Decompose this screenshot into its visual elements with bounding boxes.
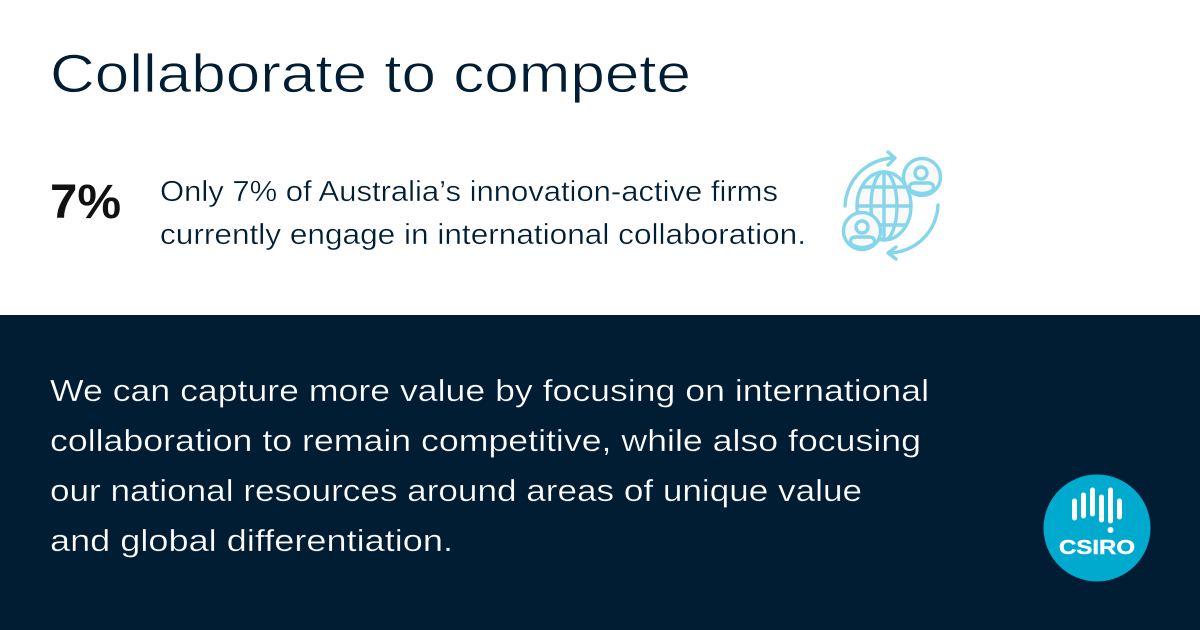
- arrow, top: [845, 152, 895, 206]
- statistic description: currently engage in international collaboration.: [160, 219, 806, 251]
- icon: CSIRO logo: [1044, 474, 1150, 582]
- panel: dark navy message band: [0, 315, 1200, 630]
- person, top right: [904, 158, 940, 196]
- globe: [857, 172, 911, 240]
- message text: and global differentiation.: [50, 523, 453, 558]
- statistic description: [160, 176, 806, 251]
- message text: [50, 373, 929, 558]
- statistic description: Only 7% of Australia’s innovation-active firms: [160, 176, 778, 208]
- message text: our national resources around areas of unique value: [50, 473, 862, 508]
- icon: CSIRO logo: CSIRO: [1059, 537, 1135, 559]
- title: Collaborate to compete: [50, 44, 691, 104]
- person, bottom left: [844, 212, 880, 250]
- message text: collaboration to remain competitive, while also focusing: [50, 423, 921, 458]
- arrow, bottom: [888, 205, 938, 259]
- message text: We can capture more value by focusing on international: [50, 373, 929, 408]
- statistic: 7%: 7%: [50, 176, 121, 229]
- icon: globe with people and exchange arrows: [844, 152, 940, 259]
